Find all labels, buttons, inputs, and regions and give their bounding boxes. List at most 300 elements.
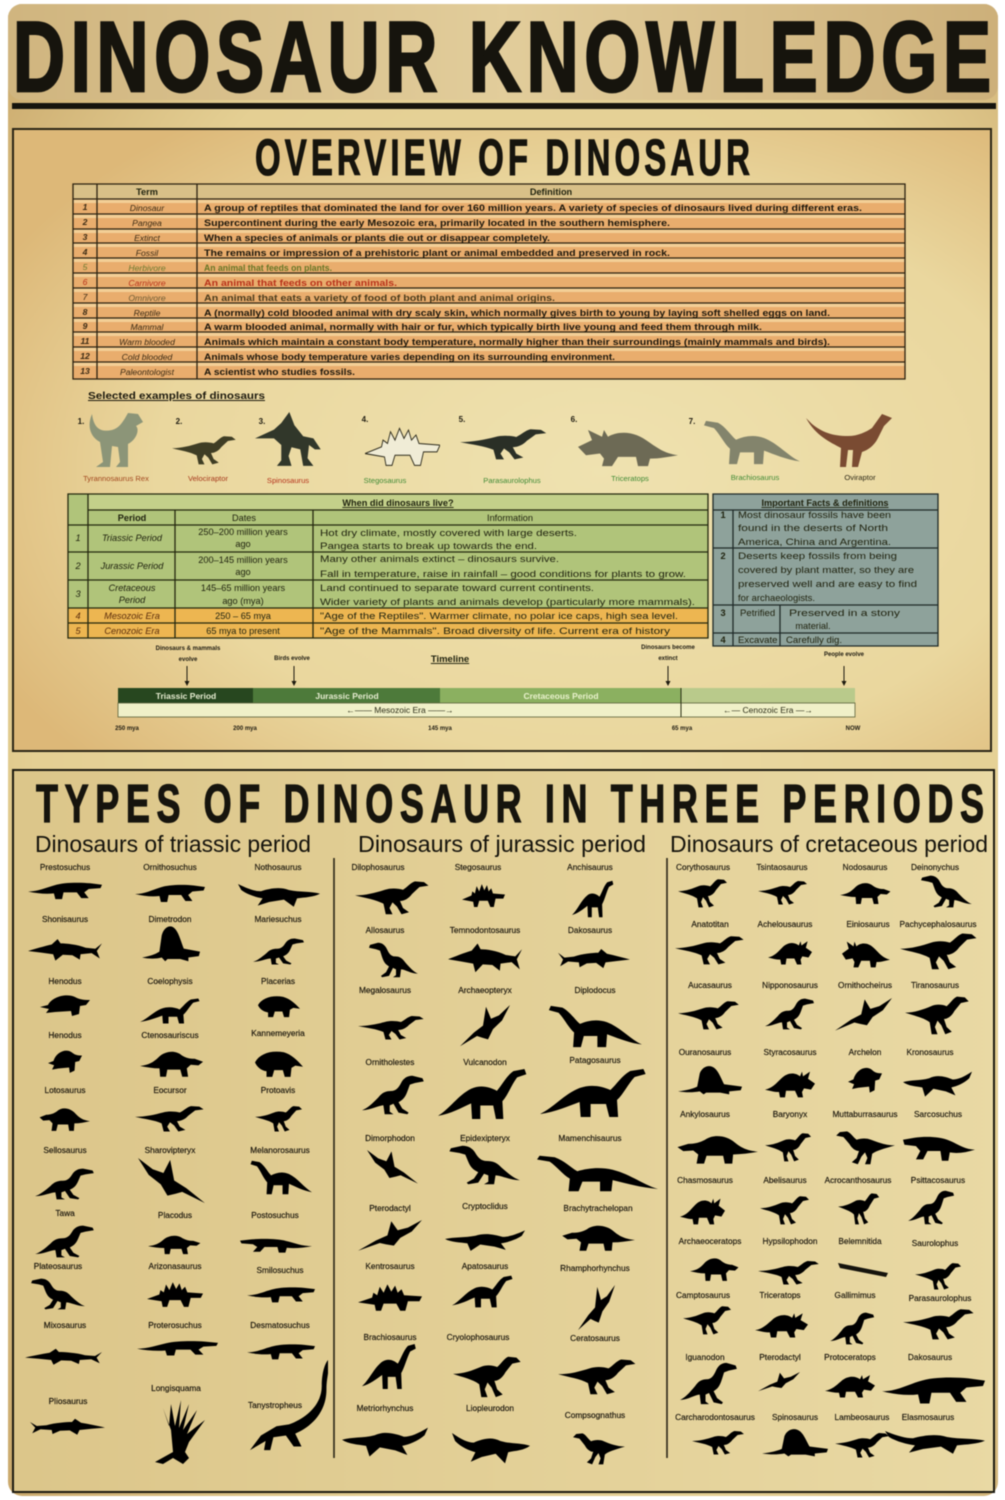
facts table: America, China and Argentina. — [738, 537, 891, 548]
dinosaur: Vulcanodon — [438, 1057, 526, 1119]
terms table: A group of reptiles that dominated the land for over 160 million years. A variety of species of dinosaurs lived during different eras. — [204, 203, 862, 214]
facts table — [713, 494, 938, 646]
dinosaur: Ctenosauriscus: Ctenosauriscus — [141, 1030, 199, 1040]
dinosaur: Ornithocheirus: Ornithocheirus — [838, 980, 892, 990]
terms table: Carnivore — [128, 278, 166, 288]
facts table: Carefully dig. — [786, 635, 842, 646]
dinosaur: Arizonasaurus: Arizonasaurus — [148, 1261, 202, 1271]
periods table: Period — [118, 513, 146, 523]
dinosaur: Lambeosaurus: Lambeosaurus — [835, 1412, 889, 1422]
dinosaur: Muttaburrasaurus — [832, 1109, 898, 1164]
timeline bar: ←—— Mesozoic Era ——→ — [346, 705, 454, 715]
dinosaur: Protoceratops — [824, 1352, 876, 1397]
dinosaur: Baryonyx: Baryonyx — [773, 1109, 808, 1119]
periods table: 1 — [75, 533, 81, 543]
periods table: Many other animals extinct – dinosaurs survive. — [320, 554, 559, 565]
dinosaur: Kentrosaurus — [358, 1261, 422, 1311]
terms table: 1 — [83, 202, 88, 212]
periods table — [68, 494, 708, 638]
dinosaur: Lotosaurus: Lotosaurus — [44, 1085, 86, 1095]
dinosaur: Longisquama — [151, 1383, 205, 1464]
dinosaur: Proterosuchus — [137, 1320, 218, 1355]
dinosaur: Triceratops — [755, 1290, 808, 1337]
dinosaur: Placodus — [148, 1210, 200, 1254]
terms table: A (normally) cold blooded animal with dry scaly skin, which normally gives birth to young by laying soft shelled eggs on land. — [204, 308, 830, 319]
dinosaur: Styracosaurus — [763, 1047, 817, 1097]
dinosaur: Anatotitan — [675, 919, 744, 964]
dinosaur: Tanystropheus: Tanystropheus — [248, 1400, 302, 1410]
timeline dates: 200 mya — [233, 726, 258, 732]
dinosaur: Plateosaurus: Plateosaurus — [34, 1261, 82, 1271]
terms table: 12 — [80, 351, 90, 361]
timeline — [115, 645, 865, 732]
dinosaur: Kannemeyeria: Kannemeyeria — [251, 1028, 305, 1038]
dinosaur: Dimetrodon: Dimetrodon — [149, 914, 192, 924]
terms table — [73, 184, 905, 379]
dinosaur: Ctenosauriscus — [140, 1030, 203, 1077]
example: spinosaurus: Spinosaurus — [267, 476, 309, 485]
dinosaur: Henodus — [48, 1030, 82, 1073]
subheading: triassic: Dinosaurs of triassic period — [35, 831, 311, 857]
facts table: Deserts keep fossils from being — [738, 551, 897, 562]
dinosaur: Archaeopteryx: Archaeopteryx — [458, 985, 513, 995]
dinosaur: Longisquama: Longisquama — [151, 1383, 201, 1393]
periods table: Information — [487, 513, 533, 523]
dinosaur: Lambeosaurus — [835, 1412, 889, 1457]
terms table: 7 — [83, 292, 89, 302]
dinosaur: Archaeoceratops: Archaeoceratops — [679, 1236, 741, 1246]
dinosaur: Stegosaurus: Stegosaurus — [455, 862, 501, 872]
terms table: Omnivore — [128, 293, 166, 303]
dinosaur: Allosaurus — [366, 925, 418, 977]
dinosaur: Metriorhynchus: Metriorhynchus — [357, 1403, 413, 1413]
dinosaur: Nodosaurus — [840, 862, 890, 904]
facts table: found in the deserts of North — [738, 523, 888, 534]
dinosaur: Postosuchus: Postosuchus — [251, 1210, 299, 1220]
timeline bar: Cretaceous Period — [523, 691, 599, 701]
dinosaur: Ornithosuchus — [135, 862, 205, 902]
dinosaur: Anchisaurus — [567, 862, 613, 917]
dinosaur: Hypsilophodon: Hypsilophodon — [763, 1236, 818, 1246]
dinosaur: Spinosaurus — [762, 1412, 828, 1456]
dinosaur: Ornitholestes — [362, 1057, 424, 1114]
facts table: material. — [795, 621, 831, 631]
example: triceratops — [571, 415, 678, 483]
dinosaur: Melanorosaurus: Melanorosaurus — [250, 1145, 310, 1155]
dinosaur: Iguanodon — [680, 1352, 737, 1404]
example: spinosaurus: 3. — [259, 417, 265, 426]
dinosaur: Cryolophosaurus — [447, 1332, 521, 1397]
periods table: Cretaceous — [109, 583, 156, 593]
terms table: A warm blooded animal, normally with hair or fur, which typically birth live young and feed them through milk. — [204, 322, 762, 333]
dinosaur: Gallimimus: Gallimimus — [834, 1290, 876, 1300]
terms table: Warm blooded — [119, 337, 175, 347]
terms table: Paleontologist — [120, 367, 175, 377]
dinosaur: Dilophosaurus: Dilophosaurus — [351, 862, 405, 872]
periods table: Cenozoic Era — [104, 626, 160, 636]
periods table: Wider variety of plants and animals develop (particularly more mammals). — [320, 597, 695, 608]
facts table: Excavate — [738, 635, 777, 646]
dinosaur: Sarcosuchus: Sarcosuchus — [914, 1109, 962, 1119]
dinosaur: Elasmosaurus: Elasmosaurus — [902, 1412, 954, 1422]
dinosaur: Dakosaurus — [558, 925, 630, 968]
terms table: 11 — [81, 336, 90, 346]
dinosaur: Archelon: Archelon — [849, 1047, 882, 1057]
dinosaur: Tiranosaurus — [905, 980, 969, 1034]
dinosaur: Dakosaurus: Dakosaurus — [908, 1352, 952, 1362]
terms table: When a species of animals or plants die out or disappear completely. — [204, 233, 550, 244]
dinosaur: Placodus: Placodus — [158, 1210, 192, 1220]
dinosaur: Henodus: Henodus — [48, 1030, 82, 1040]
example: tyrannosaurus rex: 1. — [78, 417, 84, 426]
dinosaur: Kentrosaurus: Kentrosaurus — [365, 1261, 415, 1271]
dinosaur: Ornithocheirus — [835, 980, 892, 1031]
dinosaur: Einiosaurus — [842, 919, 890, 967]
subheading: cretaceous: Dinosaurs of cretaceous period — [670, 831, 988, 857]
panel: types of dinosaur — [13, 770, 994, 1492]
dinosaur: Triceratops: Triceratops — [759, 1290, 801, 1300]
dinosaur: Pterodactyl: Pterodactyl — [759, 1352, 801, 1362]
facts table: Important Facts & definitions — [761, 498, 889, 508]
terms table: 4 — [82, 247, 88, 257]
dinosaur: Corythosaurus: Corythosaurus — [676, 862, 730, 872]
timeline event labels: Dinosaurs & mammals — [156, 646, 221, 652]
dinosaur: Carcharodontosaurus: Carcharodontosaurus — [675, 1412, 755, 1422]
dinosaur: Baryonyx — [765, 1109, 811, 1161]
dinosaur: Brachiosaurus — [362, 1332, 417, 1389]
periods table: "Age of the Reptiles". Warmer climate, no polar ice caps, high sea level. — [320, 611, 678, 622]
dinosaur: Acrocanthosaurus — [825, 1175, 891, 1224]
column: jurassic dinosaurs — [342, 862, 658, 1464]
dinosaur: Psittacosaurus — [908, 1175, 965, 1224]
dinosaur: Chasmosaurus: Chasmosaurus — [677, 1175, 733, 1185]
dinosaur: Mixosaurus: Mixosaurus — [44, 1320, 86, 1330]
timeline heading: Timeline — [431, 654, 469, 665]
dinosaur: Cryolophosaurus: Cryolophosaurus — [447, 1332, 509, 1342]
dinosaur: Mamenchisaurus — [537, 1133, 658, 1191]
periods table: 250–200 million years — [198, 527, 288, 537]
terms table: Reptile — [134, 308, 161, 318]
terms table: 5 — [83, 262, 88, 272]
periods table: "Age of the Mammals". Broad diversity of life. Current era of history — [320, 626, 670, 637]
dinosaur: Henodus: Henodus — [48, 976, 82, 986]
timeline dates: 145 mya — [428, 726, 453, 732]
periods table: Fall in temperature, raise in rainfall – good conditions for plants to grow. — [320, 569, 686, 580]
periods table: Mesozoic Era — [104, 611, 160, 621]
dinosaur: Pliosaurus: Pliosaurus — [49, 1396, 87, 1406]
dinosaur: Deinonychus — [911, 862, 972, 907]
timeline event labels: People evolve — [824, 652, 865, 658]
dinosaur: Mamenchisaurus: Mamenchisaurus — [558, 1133, 622, 1143]
dinosaur: Arizonasaurus — [147, 1261, 203, 1307]
example: triceratops: 6. — [571, 415, 577, 424]
dinosaur: Postosuchus — [240, 1210, 312, 1253]
periods table: 250 – 65 mya — [215, 611, 272, 621]
title rule — [12, 103, 996, 109]
periods table: 3 — [75, 589, 81, 599]
dinosaur: Achelousaurus: Achelousaurus — [758, 919, 812, 929]
dinosaur: Styracosaurus: Styracosaurus — [763, 1047, 817, 1057]
terms table: Pangea — [132, 218, 162, 228]
facts table: 3 — [720, 608, 726, 618]
dinosaur: Dakosaurus: Dakosaurus — [568, 925, 612, 935]
dinosaur: Kronosaurus — [903, 1047, 972, 1097]
dinosaur: Tiranosaurus: Tiranosaurus — [911, 980, 959, 990]
terms table: 8 — [83, 307, 88, 317]
dinosaur: Mariesuchus: Mariesuchus — [254, 914, 302, 924]
dinosaur: Iguanodon: Iguanodon — [685, 1352, 725, 1362]
selected examples heading: Selected examples of dinosaurs — [88, 391, 266, 402]
dinosaur: Anchisaurus: Anchisaurus — [567, 862, 613, 872]
periods table: Hot dry climate, mostly covered with large deserts. — [320, 528, 577, 539]
timeline arrows — [184, 666, 846, 686]
dinosaur: Sharovipteryx — [138, 1145, 205, 1203]
terms table: An animal that feeds on other animals. — [204, 278, 397, 289]
periods table: ago (mya) — [222, 596, 264, 606]
dinosaur: Parasaurolophus — [903, 1293, 974, 1339]
periods table: ago — [235, 539, 251, 549]
dinosaur: Desmatosuchus: Desmatosuchus — [250, 1320, 310, 1330]
dinosaur: Ankylosaurus — [677, 1109, 758, 1164]
dinosaur: Ouranosaurus — [678, 1047, 742, 1094]
dinosaur: Plateosaurus — [31, 1261, 85, 1309]
terms table: Animals which maintain a constant body temperature, normally higher than their surroundings (mainly mammals and birds). — [204, 337, 830, 348]
column: cretaceous dinosaurs — [675, 862, 985, 1457]
dinosaur: Nothosaurus: Nothosaurus — [254, 862, 302, 872]
example: parasaurolophus: Parasaurolophus — [483, 476, 541, 485]
dinosaur: Prestosuchus — [28, 862, 102, 899]
dinosaur: Deinonychus: Deinonychus — [911, 862, 959, 872]
dinosaur: Hypsilophodon — [758, 1236, 819, 1284]
dinosaur: Nipponosaurus: Nipponosaurus — [762, 980, 818, 990]
dinosaur: Aucasaurus: Aucasaurus — [688, 980, 732, 990]
heading: overview: OVERVIEW OF DINOSAUR — [255, 130, 750, 187]
dinosaur: Rhamphorhynchus: Rhamphorhynchus — [560, 1263, 630, 1273]
dinosaur: Apatosaurus: Apatosaurus — [462, 1261, 508, 1271]
facts table: covered by plant matter, so they are — [738, 565, 914, 576]
timeline dates: 250 mya — [115, 726, 140, 732]
timeline event labels: Dinosaurs become — [641, 645, 696, 651]
dinosaur: Nipponosaurus — [762, 980, 818, 1029]
dinosaur: Abelisaurus — [760, 1175, 809, 1224]
periods table: Jurassic Period — [100, 561, 164, 571]
facts table: 1 — [720, 510, 726, 520]
dinosaur: Coelophysis — [140, 976, 200, 1023]
dinosaur: Parasaurolophus: Parasaurolophus — [909, 1293, 971, 1303]
periods table: 200–145 million years — [198, 555, 288, 565]
dinosaur: Shonisaurus: Shonisaurus — [42, 914, 88, 924]
dinosaur: Cryptoclidus — [445, 1201, 525, 1251]
dinosaur: Sarcosuchus — [903, 1109, 975, 1161]
periods table: 65 mya to present — [206, 626, 280, 636]
dinosaur: Pterodactyl: Pterodactyl — [369, 1203, 411, 1213]
dinosaur: Saurolophus: Saurolophus — [912, 1238, 958, 1248]
periods table: Land continued to separate toward current continents. — [320, 583, 594, 594]
timeline event labels — [156, 645, 865, 663]
dinosaur: Eocursor: Eocursor — [153, 1085, 187, 1095]
dinosaur: Pachycephalosaurus: Pachycephalosaurus — [899, 919, 977, 929]
dinosaur: Temnodontosaurus: Temnodontosaurus — [450, 925, 520, 935]
dinosaur: Dimorphodon: Dimorphodon — [365, 1133, 415, 1143]
dinosaur: Brachiosaurus: Brachiosaurus — [363, 1332, 417, 1342]
example: stegosaurus: 4. — [362, 415, 368, 424]
terms table: Mammal — [131, 322, 165, 332]
dinosaur: Achelousaurus — [758, 919, 812, 964]
dinosaur: Protoceratops: Protoceratops — [824, 1352, 876, 1362]
facts table: Most dinosaur fossils have been — [738, 510, 891, 521]
terms table: 6 — [83, 277, 88, 287]
facts table: 4 — [720, 635, 726, 645]
terms table: A scientist who studies fossils. — [204, 367, 355, 378]
terms table: The remains or impression of a prehistoric plant or animal embedded and preserved in rock. — [204, 248, 670, 259]
facts table: for archaeologists. — [738, 593, 815, 604]
dinosaur: Einiosaurus: Einiosaurus — [846, 919, 890, 929]
dinosaur: Belemnitida — [838, 1236, 888, 1277]
dinosaur: Liopleurodon: Liopleurodon — [466, 1403, 514, 1413]
example: velociraptor: 2. — [176, 417, 182, 426]
dinosaur: Tanystropheus — [248, 1360, 328, 1450]
dinosaur: Acrocanthosaurus: Acrocanthosaurus — [825, 1175, 891, 1185]
dinosaur: Mariesuchus — [253, 914, 304, 964]
dinosaur: Belemnitida: Belemnitida — [838, 1236, 882, 1246]
dinosaur: Prestosuchus: Prestosuchus — [40, 862, 90, 872]
dinosaur: Compsognathus — [565, 1410, 625, 1464]
terms table: An animal that eats a variety of food of both plant and animal origins. — [204, 293, 555, 304]
dinosaur: Ankylosaurus: Ankylosaurus — [680, 1109, 730, 1119]
dinosaur: Dilophosaurus — [351, 862, 428, 914]
subheading: jurassic: Dinosaurs of jurassic period — [358, 831, 646, 857]
dinosaur: Chasmosaurus — [677, 1175, 733, 1224]
example: brachiosaurus: Brachiosaurus — [731, 473, 779, 482]
dinosaur: Sellosaurus — [35, 1145, 94, 1199]
dinosaur: Ouranosaurus: Ouranosaurus — [679, 1047, 731, 1057]
example: brachiosaurus — [689, 417, 800, 482]
terms table: Dinosaur — [130, 203, 165, 213]
dinosaur: Psittacosaurus: Psittacosaurus — [911, 1175, 965, 1185]
dinosaur: Archelon — [848, 1047, 882, 1093]
facts table: preserved well and are easy to find — [738, 579, 917, 590]
dinosaur: Ornithosuchus: Ornithosuchus — [143, 862, 197, 872]
dinosaur: Camptosaurus — [676, 1290, 731, 1334]
timeline event labels: extinct — [658, 656, 678, 662]
example: oviraptor — [806, 414, 892, 482]
dinosaur: Saurolophus — [912, 1238, 961, 1289]
dinosaur: Shonisaurus — [28, 914, 102, 961]
dinosaur: Brachytrachelopan — [562, 1203, 635, 1251]
dinosaur: Lotosaurus — [40, 1085, 90, 1131]
dinosaur: Stegosaurus — [455, 862, 505, 907]
timeline dates: 65 mya — [672, 726, 693, 732]
periods table: Triassic Period — [102, 533, 163, 543]
dinosaur: Tawa: Tawa — [55, 1208, 75, 1218]
dinosaur: Allosaurus: Allosaurus — [366, 925, 404, 935]
dinosaur: Patagosaurus: Patagosaurus — [569, 1055, 621, 1065]
dinosaur: Mixosaurus — [25, 1320, 102, 1365]
dinosaur: Camptosaurus: Camptosaurus — [676, 1290, 730, 1300]
dinosaur: Abelisaurus: Abelisaurus — [763, 1175, 807, 1185]
periods table: Period — [119, 595, 146, 605]
dinosaur: Archaeopteryx — [458, 985, 513, 1046]
title band — [8, 2, 998, 113]
dinosaur: Desmatosuchus — [247, 1320, 315, 1359]
example: stegosaurus: Stegosaurus — [364, 476, 407, 485]
terms table: 3 — [83, 232, 88, 242]
dinosaur: Carcharodontosaurus — [675, 1412, 755, 1454]
dinosaur: Pliosaurus — [30, 1396, 105, 1435]
example: triceratops: Triceratops — [611, 474, 649, 483]
timeline bar — [118, 688, 855, 717]
periods table: 2 — [74, 561, 81, 571]
terms table: 13 — [80, 366, 90, 376]
dinosaur: Patagosaurus — [540, 1055, 646, 1117]
dinosaur: Placerias: Placerias — [261, 976, 295, 986]
dinosaur: Protoavis — [255, 1085, 302, 1131]
dinosaur: Proterosuchus: Proterosuchus — [148, 1320, 202, 1330]
terms table: 9 — [83, 321, 88, 331]
facts table: 2 — [720, 551, 726, 561]
example: parasaurolophus: 5. — [459, 415, 465, 424]
dinosaur: Anatotitan: Anatotitan — [691, 919, 729, 929]
dinosaur: Tsintaosaurus: Tsintaosaurus — [756, 862, 808, 872]
dinosaur: Diplodocus — [549, 985, 642, 1047]
dinosaur: Muttaburrasaurus: Muttaburrasaurus — [832, 1109, 898, 1119]
example: spinosaurus — [255, 412, 321, 485]
dinosaur: Corythosaurus — [676, 862, 730, 907]
dinosaur: Liopleurodon — [452, 1403, 530, 1463]
terms table: Definition — [530, 187, 573, 197]
dinosaur: Ornitholestes: Ornitholestes — [366, 1057, 414, 1067]
periods table: Dates — [232, 513, 256, 523]
timeline event labels: Birds evolve — [274, 656, 311, 662]
terms table: 2 — [82, 217, 88, 227]
dinosaur: Spinosaurus: Spinosaurus — [772, 1412, 818, 1422]
dinosaur: Placerias — [258, 976, 300, 1017]
dinosaur: Dakosaurus — [882, 1352, 985, 1403]
dinosaur: Gallimimus — [830, 1290, 876, 1344]
dinosaur: Nodosaurus: Nodosaurus — [843, 862, 887, 872]
dinosaur: Megalosaurus — [358, 985, 424, 1040]
terms table: An animal that feeds on plants. — [204, 263, 332, 274]
dinosaur: Tawa — [35, 1208, 94, 1257]
column: triassic dinosaurs — [25, 862, 328, 1464]
dinosaur: Dimetrodon — [142, 914, 200, 961]
dinosaur: Compsognathus: Compsognathus — [565, 1410, 625, 1420]
example: brachiosaurus: 7. — [689, 417, 695, 426]
terms table: Herbivore — [128, 263, 166, 273]
example: parasaurolophus — [459, 415, 546, 485]
periods table: 5 — [75, 626, 81, 636]
dinosaur: Smilosuchus — [247, 1265, 315, 1302]
example: oviraptor: Oviraptor — [844, 473, 876, 482]
dinosaur: Elasmosaurus — [885, 1412, 985, 1454]
terms table: Animals whose body temperature varies depending on its surrounding environment. — [204, 352, 615, 363]
dinosaur: Archaeoceratops — [679, 1236, 741, 1281]
periods table: 4 — [75, 611, 81, 621]
example: tyrannosaurus rex: Tyrannosaurus Rex — [83, 474, 149, 483]
timeline bar: ←— Cenozoic Era —→ — [723, 705, 813, 715]
dinosaur: Apatosaurus — [452, 1261, 512, 1307]
terms table: Cold blooded — [122, 352, 173, 362]
timeline bar: Jurassic Period — [315, 691, 379, 701]
dinosaur: Dimorphodon — [365, 1133, 418, 1184]
dinosaur: Ceratosaurus — [558, 1333, 635, 1394]
example: stegosaurus — [362, 415, 440, 485]
example: tyrannosaurus rex — [78, 413, 149, 483]
dinosaur: Henodus — [40, 976, 90, 1016]
example: velociraptor — [172, 417, 236, 483]
dinosaur: Sellosaurus: Sellosaurus — [43, 1145, 87, 1155]
dinosaur: Epidexipteryx: Epidexipteryx — [460, 1133, 511, 1143]
